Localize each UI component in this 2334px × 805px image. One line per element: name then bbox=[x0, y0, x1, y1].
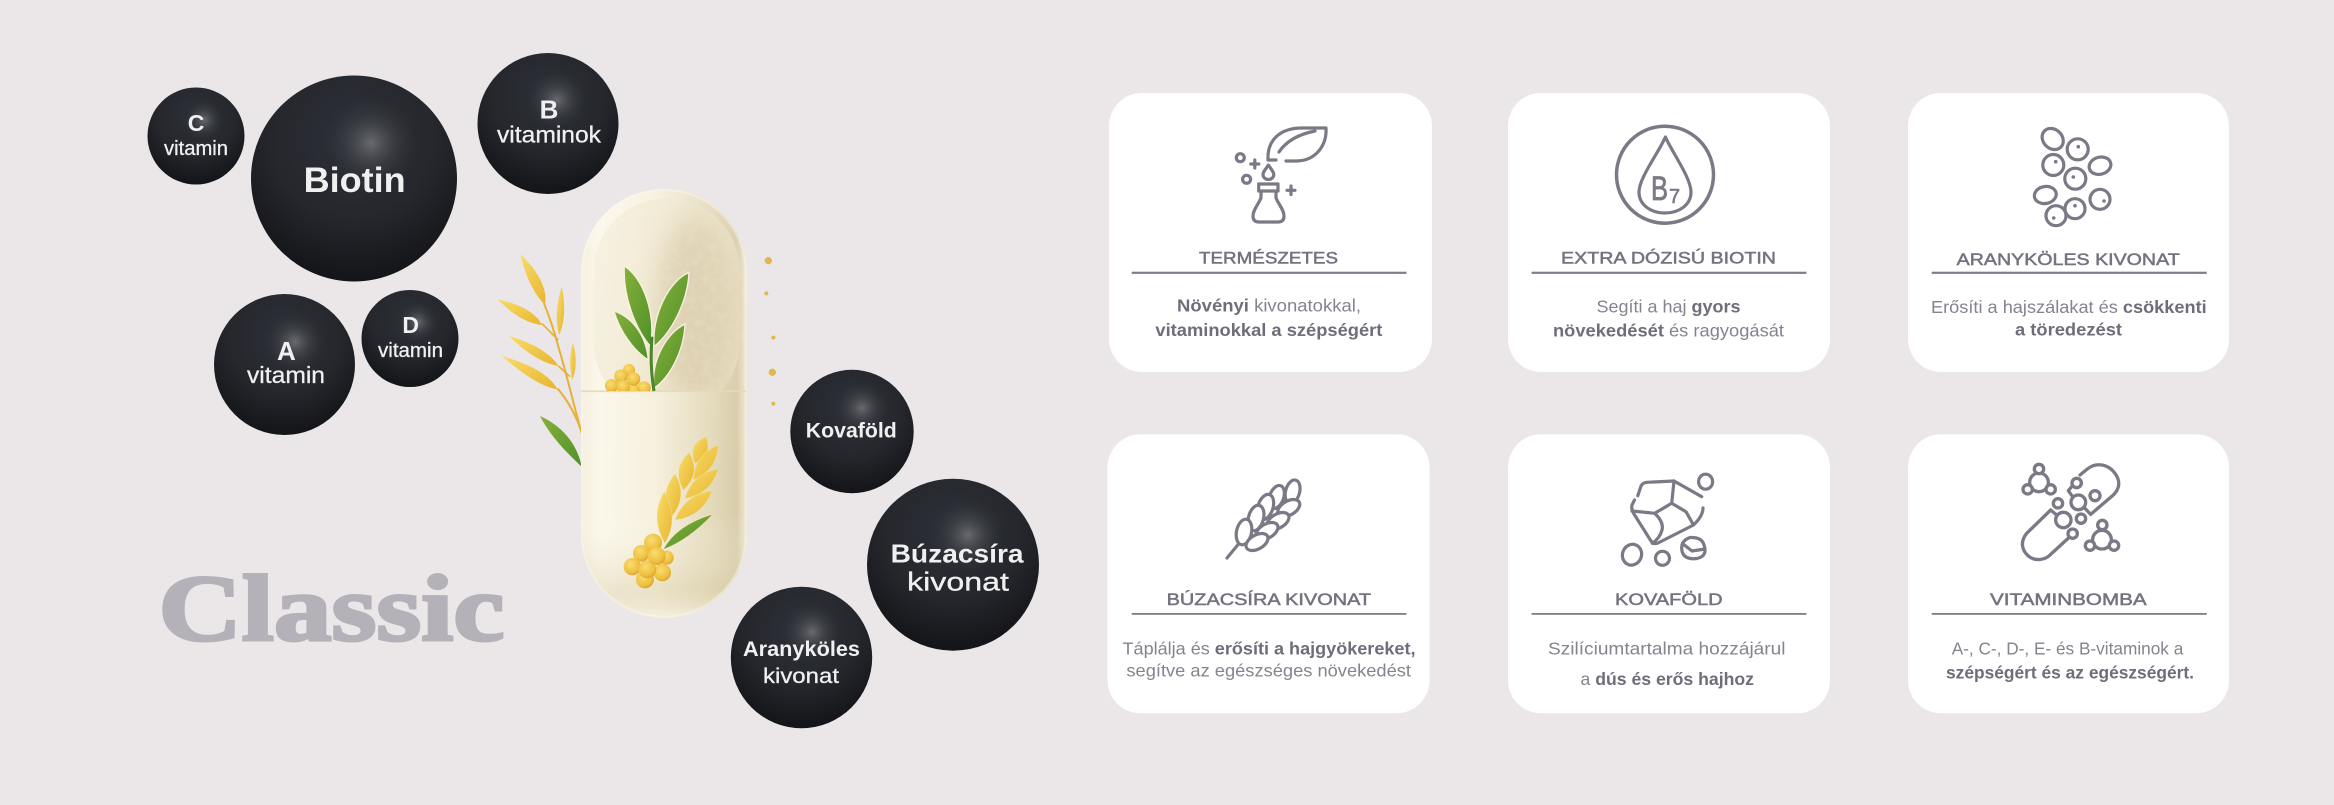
wheat ear on capsule bbox=[657, 437, 718, 549]
icon: millet grains bbox=[2033, 124, 2113, 226]
panel: Természetes bbox=[1109, 93, 1432, 372]
sphere: Kovaföld bbox=[790, 370, 914, 493]
body text: segítve az egészséges növekedést bbox=[1126, 661, 1411, 681]
panel: Kovaföld bbox=[1508, 434, 1830, 713]
heading: KOVAFÖLD bbox=[1615, 590, 1723, 609]
icon: rocks bbox=[1619, 474, 1713, 568]
sphere: B vitaminok: vitaminok bbox=[497, 122, 602, 148]
green sprig bbox=[614, 266, 689, 391]
heading: EXTRA DÓZISÚ BIOTIN bbox=[1561, 248, 1776, 267]
capsule shell bbox=[581, 189, 747, 618]
body text bbox=[1931, 297, 2207, 340]
icon: B7 drop: B bbox=[1651, 170, 1668, 208]
icon: wheat bbox=[1227, 478, 1303, 558]
body text: Segíti a haj gyors bbox=[1596, 297, 1741, 317]
millet cluster on capsule bbox=[624, 534, 674, 588]
heading: BÚZACSÍRA KIVONAT bbox=[1167, 590, 1371, 609]
icon: B7 drop: 7 bbox=[1669, 186, 1680, 208]
body text: Táplálja és erősíti a hajgyökereket, bbox=[1122, 638, 1416, 658]
body text bbox=[1122, 638, 1416, 681]
sphere: B vitaminok bbox=[478, 53, 618, 194]
sphere: Aranyköles kivonat: Aranyköles bbox=[743, 638, 860, 661]
sphere: C vitamin: C bbox=[188, 110, 204, 136]
sphere: Búzacsíra kivonat bbox=[867, 479, 1039, 651]
sphere: B vitaminok: B bbox=[540, 95, 558, 125]
body text: Szilíciumtartalma hozzájárul bbox=[1548, 638, 1786, 658]
body text bbox=[1548, 638, 1786, 689]
title: Classic: Classic bbox=[158, 557, 504, 661]
body text: Növényi kivonatokkal, bbox=[1177, 296, 1361, 316]
powder filling bbox=[594, 200, 738, 390]
golden branch behind capsule bbox=[498, 254, 582, 467]
sphere: Aranyköles kivonat: kivonat bbox=[763, 665, 839, 688]
heading: VITAMINBOMBA bbox=[1990, 590, 2147, 609]
body text: növekedését és ragyogását bbox=[1553, 321, 1784, 341]
icon: capsule and molecules bbox=[2022, 464, 2119, 560]
body text: vitaminokkal a szépségért bbox=[1155, 320, 1383, 340]
capsule with plants bbox=[498, 189, 776, 618]
capsule seam bbox=[581, 389, 747, 394]
sphere: Biotin: Biotin bbox=[304, 161, 406, 200]
body text: Erősíti a hajszálakat és csökkenti bbox=[1931, 297, 2207, 317]
panel: Búzacsíra kivonat bbox=[1108, 434, 1430, 713]
sphere: A vitamin: vitamin bbox=[247, 362, 325, 388]
panel: Vitaminbomba bbox=[1908, 434, 2229, 713]
body text: szépségért és az egészségért. bbox=[1946, 662, 2194, 682]
sphere: C vitamin: vitamin bbox=[164, 138, 228, 160]
sphere: D vitamin: vitamin bbox=[378, 340, 443, 362]
golden millet at seam bbox=[605, 364, 651, 391]
body text bbox=[1553, 297, 1784, 341]
body text: a töredezést bbox=[2015, 320, 2122, 340]
sphere: Búzacsíra kivonat: kivonat bbox=[907, 567, 1010, 597]
sphere: D vitamin: D bbox=[402, 312, 419, 338]
body text: A-, C-, D-, E- és B-vitaminok a bbox=[1952, 638, 2184, 658]
body text bbox=[1155, 296, 1383, 340]
body text bbox=[1946, 638, 2194, 682]
sphere: D vitamin bbox=[362, 290, 458, 387]
body text: a dús és erős hajhoz bbox=[1580, 669, 1754, 689]
heading: ARANYKÖLES KIVONAT bbox=[1957, 250, 2180, 269]
sphere: A vitamin: A bbox=[277, 336, 296, 366]
icon: B7 drop bbox=[1616, 126, 1714, 223]
panel: Aranyköles kivonat bbox=[1908, 93, 2229, 372]
golden dots bbox=[764, 257, 776, 406]
heading: TERMÉSZETES bbox=[1199, 248, 1338, 267]
sphere: Biotin bbox=[251, 76, 457, 282]
sphere: C vitamin bbox=[148, 88, 244, 184]
sphere: Búzacsíra kivonat: Búzacsíra bbox=[891, 539, 1024, 569]
sphere: Kovaföld: Kovaföld bbox=[806, 420, 897, 443]
icon: leaf and flask bbox=[1236, 128, 1326, 222]
sphere: Aranyköles kivonat bbox=[731, 587, 872, 728]
sphere: A vitamin bbox=[214, 294, 355, 435]
panel: Extra dózisú biotin bbox=[1508, 93, 1830, 372]
